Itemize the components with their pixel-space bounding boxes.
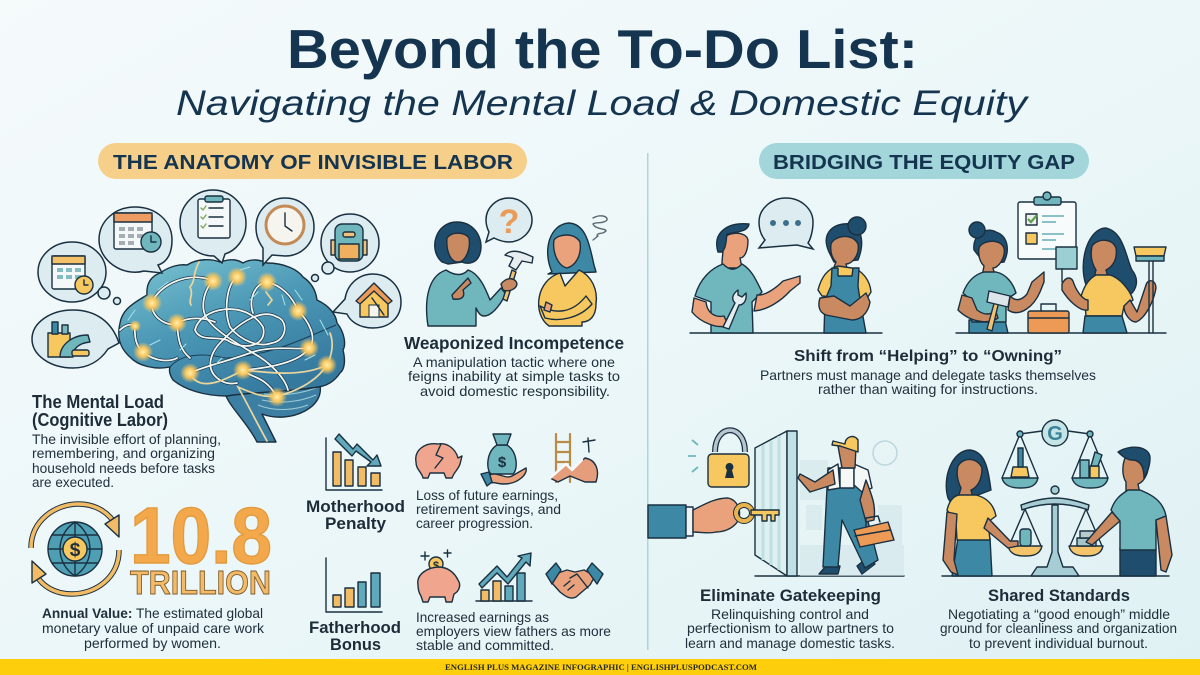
speech bubble: calendar	[99, 207, 172, 273]
panel: bridging the equity gap	[648, 143, 1177, 651]
title	[176, 18, 1030, 123]
speech bubble: question mark	[486, 198, 532, 242]
icon: growth chart with arrow	[476, 553, 532, 601]
figure: man with wrench	[692, 224, 800, 333]
broom	[1134, 247, 1166, 333]
text block: shift from helping to owning: Shift from “Helping” to “Owning”	[794, 348, 1062, 365]
speech bubble: ellipsis	[759, 198, 813, 249]
text block: motherhood penalty description: Loss of future earnings,	[416, 487, 558, 503]
background room silhouettes	[800, 441, 904, 576]
illustration: two women weaponized incompetence	[427, 198, 607, 326]
icon: piggy bank with coin: $	[433, 560, 439, 572]
figure: woman in yellow	[943, 450, 1018, 576]
text block: shift from helping to owning	[760, 348, 1096, 397]
text block: shared standards	[940, 587, 1177, 651]
hand and sleeve with key	[648, 498, 779, 538]
text block: the mental load: household needs before tasks	[32, 460, 215, 476]
heading pill: anatomy of invisible labor: THE ANATOMY OF INVISIBLE LABOR	[113, 152, 514, 174]
text block: eliminate gatekeeping: learn and manage domestic tasks.	[685, 635, 895, 651]
text block: eliminate gatekeeping: Eliminate Gatekeeping	[700, 587, 881, 605]
text block: the mental load: remembering, and organizing	[32, 445, 215, 461]
text block: fatherhood bonus description	[416, 609, 611, 653]
heading pill: bridging the equity gap: BRIDGING THE EQUITY GAP	[773, 152, 1075, 174]
icon: piggy bank with coin	[418, 550, 460, 602]
text block: fatherhood bonus description: employers view fathers as more	[416, 623, 611, 639]
figure: woman with arms crossed	[818, 217, 871, 333]
footer bar: ENGLISH PLUS MAGAZINE INFOGRAPHIC | ENGLISHPLUSPODCAST.COM	[445, 663, 757, 672]
text block: annual value: monetary value of unpaid care work	[42, 620, 265, 636]
text block: annual value: performed by women.	[84, 635, 221, 651]
icon: frustration swirl	[593, 216, 607, 240]
text block: the mental load	[32, 392, 221, 490]
speech bubble: clock	[256, 198, 314, 265]
heading pill: bridging the equity gap	[759, 143, 1089, 179]
text block: shared standards: Negotiating a “good enough” middle	[948, 606, 1170, 622]
text block: weaponized incompetence: avoid domestic responsibility.	[420, 383, 610, 399]
speech bubble: question mark: ?	[499, 203, 519, 241]
text block: motherhood penalty description	[416, 487, 561, 531]
text block: annual value	[42, 605, 265, 651]
footer bar	[0, 659, 1200, 675]
title: Navigating the Mental Load & Domestic Equity	[176, 84, 1030, 123]
text block: the mental load: (Cognitive Labor)	[32, 410, 168, 430]
task clipboard	[1018, 192, 1076, 259]
text block: the mental load: are executed.	[32, 474, 114, 490]
text block: weaponized incompetence: Weaponized Incompetence	[404, 333, 624, 353]
text block: motherhood penalty label: Penalty	[325, 515, 387, 533]
divider between panels	[647, 153, 648, 650]
illustration: key, lock, and worker	[648, 430, 904, 576]
figure: man in teal	[1086, 447, 1172, 576]
text block: weaponized incompetence: feigns inability at simple tasks to	[408, 368, 620, 384]
illustration: two women with task board	[956, 192, 1166, 333]
icon: broken piggy bank	[416, 444, 462, 478]
upper scale with G badge	[1002, 420, 1108, 488]
toolbox	[1028, 304, 1069, 333]
padlock	[688, 430, 749, 487]
panel: the anatomy of invisible labor	[31, 143, 624, 654]
text block: eliminate gatekeeping: Relinquishing control and	[711, 606, 869, 622]
chart: motherhood penalty falling bars	[326, 434, 382, 490]
text block: shared standards: Shared Standards	[988, 587, 1130, 605]
text block: shared standards: to prevent individual burnout.	[969, 635, 1148, 651]
chart: fatherhood bonus rising bars	[326, 558, 382, 612]
text block: shared standards: ground for cleanliness and organization	[940, 620, 1177, 636]
icon: globe with dollar and arrows	[31, 504, 119, 594]
figure: woman with dustpan and broom	[1056, 228, 1156, 333]
text block: motherhood penalty label: Motherhood	[306, 498, 405, 516]
text block: motherhood penalty description: retirement savings, and	[416, 501, 561, 517]
figure: woman with hammer	[427, 222, 533, 326]
figure: woman with hammer	[958, 222, 1044, 333]
big number: 10.8 trillion: 10.8	[130, 491, 272, 580]
speech bubble: checklist	[180, 190, 246, 263]
icon: money bag in hand: $	[498, 454, 507, 471]
speech bubble: house repair	[333, 274, 401, 328]
text block: fatherhood bonus label	[309, 619, 401, 654]
open door	[755, 431, 797, 576]
text block: eliminate gatekeeping: perfectionism to allow partners to	[687, 620, 894, 636]
text block: fatherhood bonus label: Fatherhood	[309, 619, 401, 637]
illustration: balanced scales with couple	[942, 420, 1172, 576]
big number: 10.8 trillion: TRILLION	[130, 564, 271, 601]
text block: weaponized incompetence: A manipulation tactic where one	[413, 354, 615, 370]
text block: the mental load: The Mental Load	[32, 392, 164, 412]
text block: motherhood penalty description: career progression.	[416, 515, 533, 531]
figure: frustrated woman	[539, 223, 596, 326]
text block: annual value: Annual Value: The estimated global	[42, 605, 263, 621]
illustration: man and woman talking	[690, 198, 882, 333]
text block: fatherhood bonus description: stable and committed.	[416, 637, 554, 653]
text block: eliminate gatekeeping	[685, 587, 895, 651]
text block: weaponized incompetence	[404, 333, 624, 399]
heading pill: anatomy of invisible labor	[98, 143, 527, 179]
upper scale with G badge: G	[1047, 423, 1063, 445]
text block: motherhood penalty label	[306, 498, 405, 533]
speech bubble: cleaning supplies	[32, 310, 119, 368]
icon: globe with dollar and arrows: $	[70, 540, 81, 561]
text block: fatherhood bonus description: Increased earnings as	[416, 609, 549, 625]
icon: handshake	[546, 563, 603, 598]
thought bubble: small calendar	[38, 242, 120, 304]
text block: fatherhood bonus label: Bonus	[330, 636, 381, 654]
title: Beyond the To-Do List:	[287, 18, 918, 80]
thought bubble: backpack	[312, 214, 379, 282]
text block: shift from helping to owning: rather than waiting for instructions.	[818, 381, 1038, 397]
text block: the mental load: The invisible effort of planning,	[32, 431, 221, 447]
icon: money bag in hand	[481, 434, 526, 486]
figure: worker in overalls	[798, 437, 894, 574]
icon: broken career ladder	[550, 434, 598, 482]
illustration: brain with tangled connections	[119, 260, 345, 442]
text block: shift from helping to owning: Partners must manage and delegate tasks themselves	[760, 367, 1096, 383]
lower scale stand and pans	[1008, 486, 1103, 576]
